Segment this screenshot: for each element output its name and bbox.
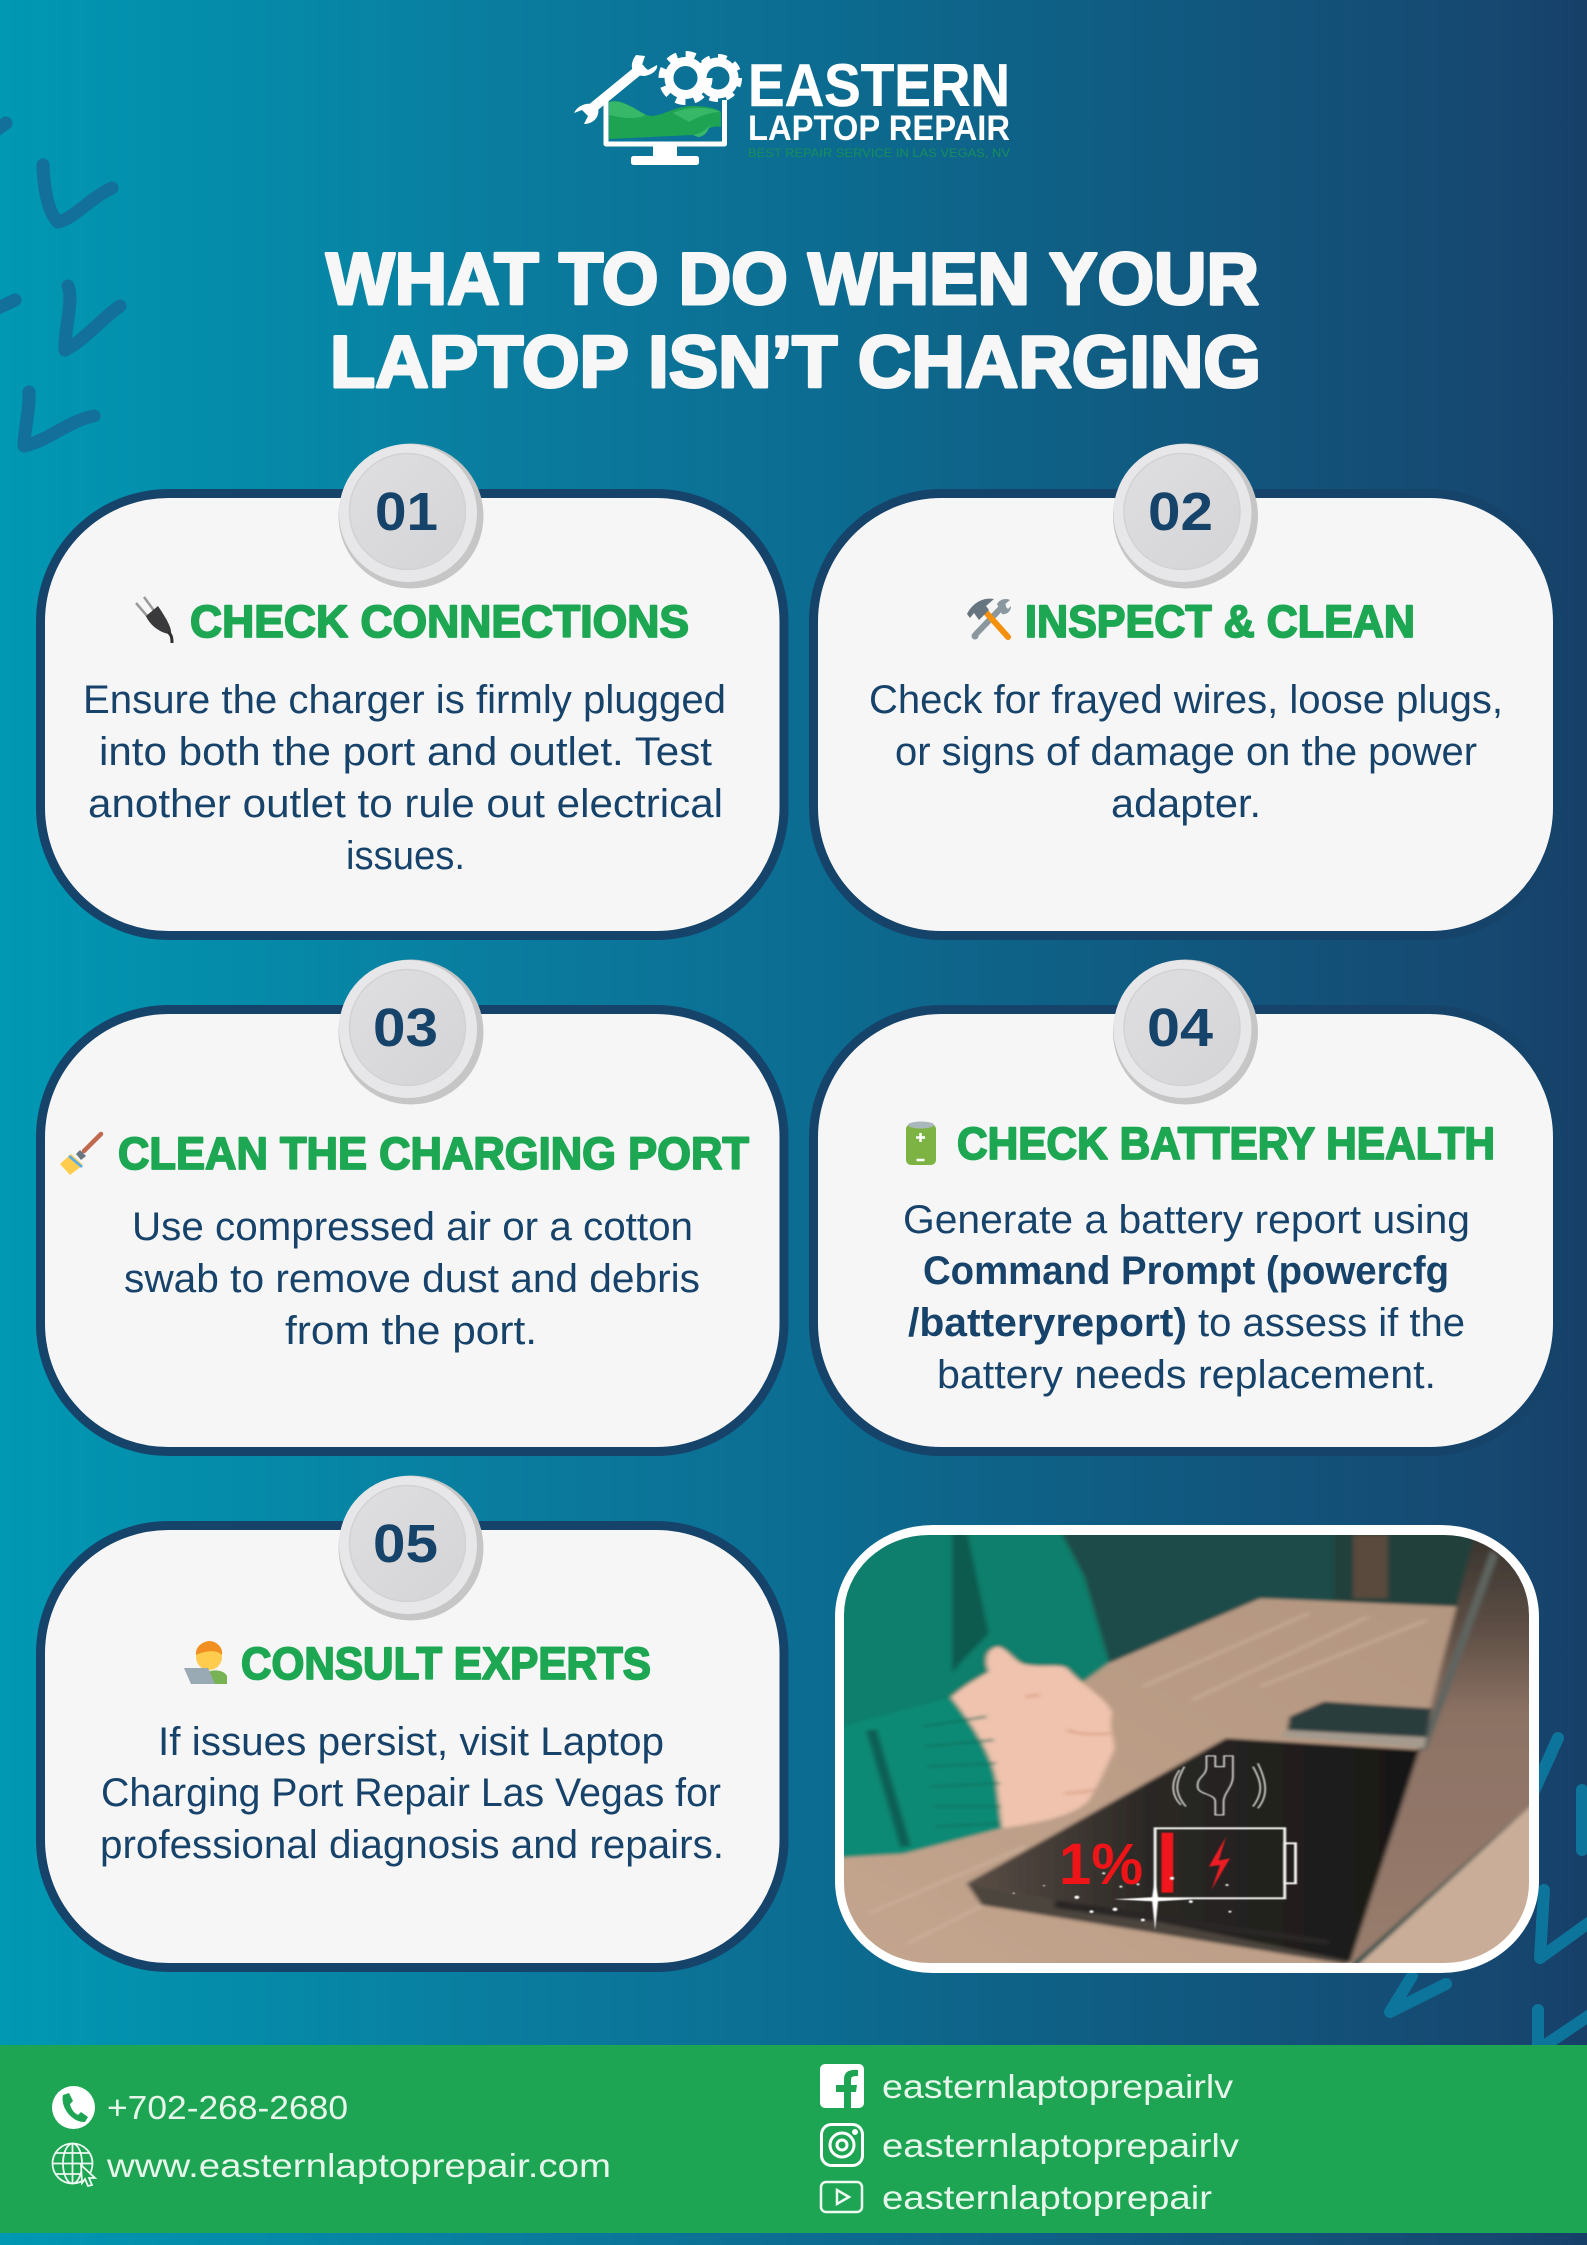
facebook handle: easternlaptoprepairlv (882, 2068, 1234, 2105)
heading: CHECK BATTERY HEALTH (957, 1118, 1495, 1169)
instagram handle: easternlaptoprepairlv (882, 2127, 1240, 2164)
body text: issues. (346, 834, 465, 878)
icon: technologist (184, 1641, 227, 1684)
number badge 02 (1113, 444, 1258, 588)
number badge 03: 03 (373, 998, 438, 1058)
body text: If issues persist, visit Laptop (158, 1720, 664, 1764)
body text: Charging Port Repair Las Vegas for (101, 1771, 721, 1815)
footer band (0, 2045, 1587, 2233)
card (40, 1526, 784, 1968)
heading: CLEAN THE CHARGING PORT (118, 1128, 749, 1179)
body text: from the port. (285, 1309, 537, 1353)
body text: to assess if the (1198, 1301, 1465, 1345)
icon: youtube (821, 2182, 862, 2212)
icon: plug (136, 597, 172, 643)
footer social: youtube (821, 2179, 1212, 2216)
body text (869, 678, 1503, 826)
card (814, 1010, 1558, 1452)
body text: /batteryreport) (908, 1301, 1187, 1345)
number badge 02: 02 (1148, 482, 1213, 542)
title: LAPTOP ISN’T CHARGING (330, 322, 1261, 403)
logo tagline: BEST REPAIR SERVICE IN LAS VEGAS, NV (748, 146, 1010, 160)
icon: paint brush (60, 1134, 101, 1175)
icon: phone (52, 2086, 95, 2129)
heading: CHECK CONNECTIONS (190, 596, 689, 647)
number badge 03 (338, 960, 484, 1104)
icon: battery (906, 1122, 936, 1165)
body text (903, 1198, 1470, 1397)
icon: facebook (820, 2064, 864, 2108)
footer social: facebook (820, 2064, 1234, 2108)
title (326, 239, 1261, 403)
card (40, 494, 784, 936)
heading: INSPECT & CLEAN (1025, 596, 1415, 647)
youtube handle: easternlaptoprepair (882, 2179, 1212, 2216)
panel: step 5 consult experts (40, 1476, 784, 1968)
card (814, 494, 1558, 936)
body text: battery needs replacement. (937, 1353, 1436, 1397)
photo overlay text: 1% (1059, 1832, 1143, 1897)
body text: or signs of damage on the power (895, 730, 1477, 774)
body text: Command Prompt (powercfg (923, 1249, 1449, 1293)
number badge 05 (338, 1476, 484, 1620)
phone number: +702-268-2680 (107, 2089, 348, 2126)
footer social: instagram (822, 2124, 1240, 2166)
body text (100, 1720, 724, 1867)
body text (83, 678, 726, 878)
number badge 05: 05 (373, 1514, 438, 1574)
body text: Use compressed air or a cotton (132, 1205, 693, 1249)
body text: Check for frayed wires, loose plugs, (869, 678, 1503, 722)
icon: instagram (822, 2124, 862, 2166)
photo scene (830, 1525, 1544, 1972)
logo (574, 52, 1010, 165)
body text (124, 1205, 700, 1353)
footer contact: website (52, 2144, 611, 2186)
number badge 04: 04 (1147, 998, 1213, 1058)
logo wordmark: Laptop Repair: LAPTOP REPAIR (748, 109, 1010, 148)
body text: adapter. (1111, 782, 1261, 826)
icon: hammer and wrench (967, 599, 1011, 640)
number badge 04 (1113, 960, 1258, 1104)
card (40, 1010, 784, 1452)
body text: into both the port and outlet. Test (99, 730, 712, 774)
body text: another outlet to rule out electrical (88, 782, 723, 826)
number badge 01 (338, 444, 484, 588)
panel: step 3 clean the charging port (40, 960, 784, 1452)
body text: Ensure the charger is firmly plugged (83, 678, 726, 722)
number badge 01: 01 (375, 482, 438, 542)
footer contact: phone (52, 2086, 348, 2129)
heading: CONSULT EXPERTS (241, 1638, 651, 1689)
panel: step 4 check battery health (814, 960, 1558, 1452)
panel: step 2 inspect and clean (814, 444, 1558, 936)
body text: professional diagnosis and repairs. (100, 1823, 724, 1867)
logo wordmark: Eastern: EASTERN (748, 52, 1010, 119)
icon: globe with cursor (52, 2144, 95, 2186)
panel: step 1 check connections (40, 444, 784, 936)
decorative checks top left (0, 123, 120, 446)
title: WHAT TO DO WHEN YOUR (326, 239, 1259, 320)
decorative checks bottom right (1390, 1738, 1587, 2050)
body text: Generate a battery report using (903, 1198, 1470, 1242)
website address: www.easternlaptoprepair.com (106, 2147, 611, 2184)
logo icon: monitor with wrench and gears (574, 55, 738, 165)
body text: swab to remove dust and debris (124, 1257, 700, 1301)
photo: laptop at 1 percent battery (830, 1525, 1544, 1973)
photo frame (835, 1525, 1539, 1973)
